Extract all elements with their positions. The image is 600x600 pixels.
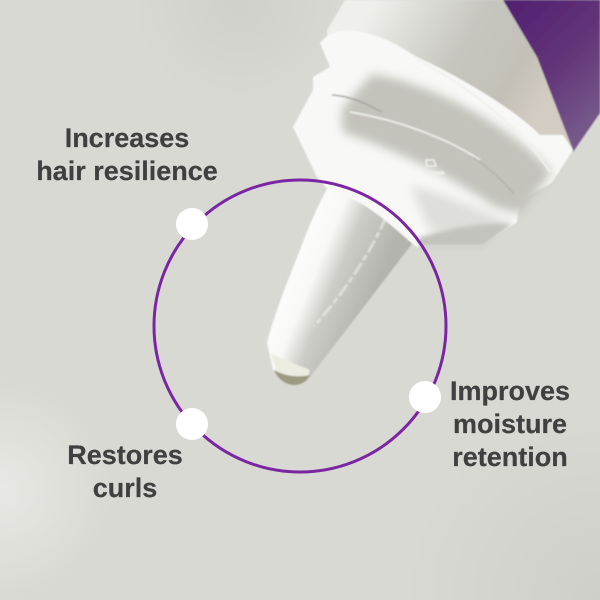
dot: restores curls — [176, 408, 208, 440]
label: restores curls — [67, 440, 183, 503]
nozzle seam — [314, 217, 386, 326]
label: increases hair resilience: hair resilience — [36, 156, 218, 186]
dot: moisture retention — [409, 381, 441, 413]
dot: hair resilience — [176, 208, 208, 240]
label: restores curls: curls — [93, 473, 157, 503]
bottle shoulder — [327, 0, 573, 185]
circle ring — [154, 180, 446, 472]
lower collar haze — [410, 185, 512, 240]
nozzle tip — [271, 354, 310, 378]
collar groove — [332, 95, 382, 112]
oil drop — [274, 370, 310, 385]
white ridge — [350, 112, 480, 160]
label: improves moisture retention: Improves — [450, 376, 570, 406]
bottle collar — [293, 30, 573, 247]
label: increases hair resilience: Increases — [65, 123, 189, 153]
label: improves moisture retention — [450, 376, 570, 472]
bottle purple band — [503, 0, 600, 152]
lower collar shadow — [418, 224, 512, 247]
label: improves moisture retention: retention — [452, 442, 568, 472]
label: improves moisture retention: moisture — [453, 409, 567, 439]
collar shading — [342, 74, 552, 214]
label: restores curls: Restores — [67, 440, 183, 470]
beige groove — [473, 157, 514, 194]
bottle — [267, 0, 600, 385]
embossed mark — [426, 160, 444, 174]
rim highlight — [417, 60, 550, 172]
label: increases hair resilience — [36, 123, 218, 186]
nozzle — [267, 187, 415, 383]
